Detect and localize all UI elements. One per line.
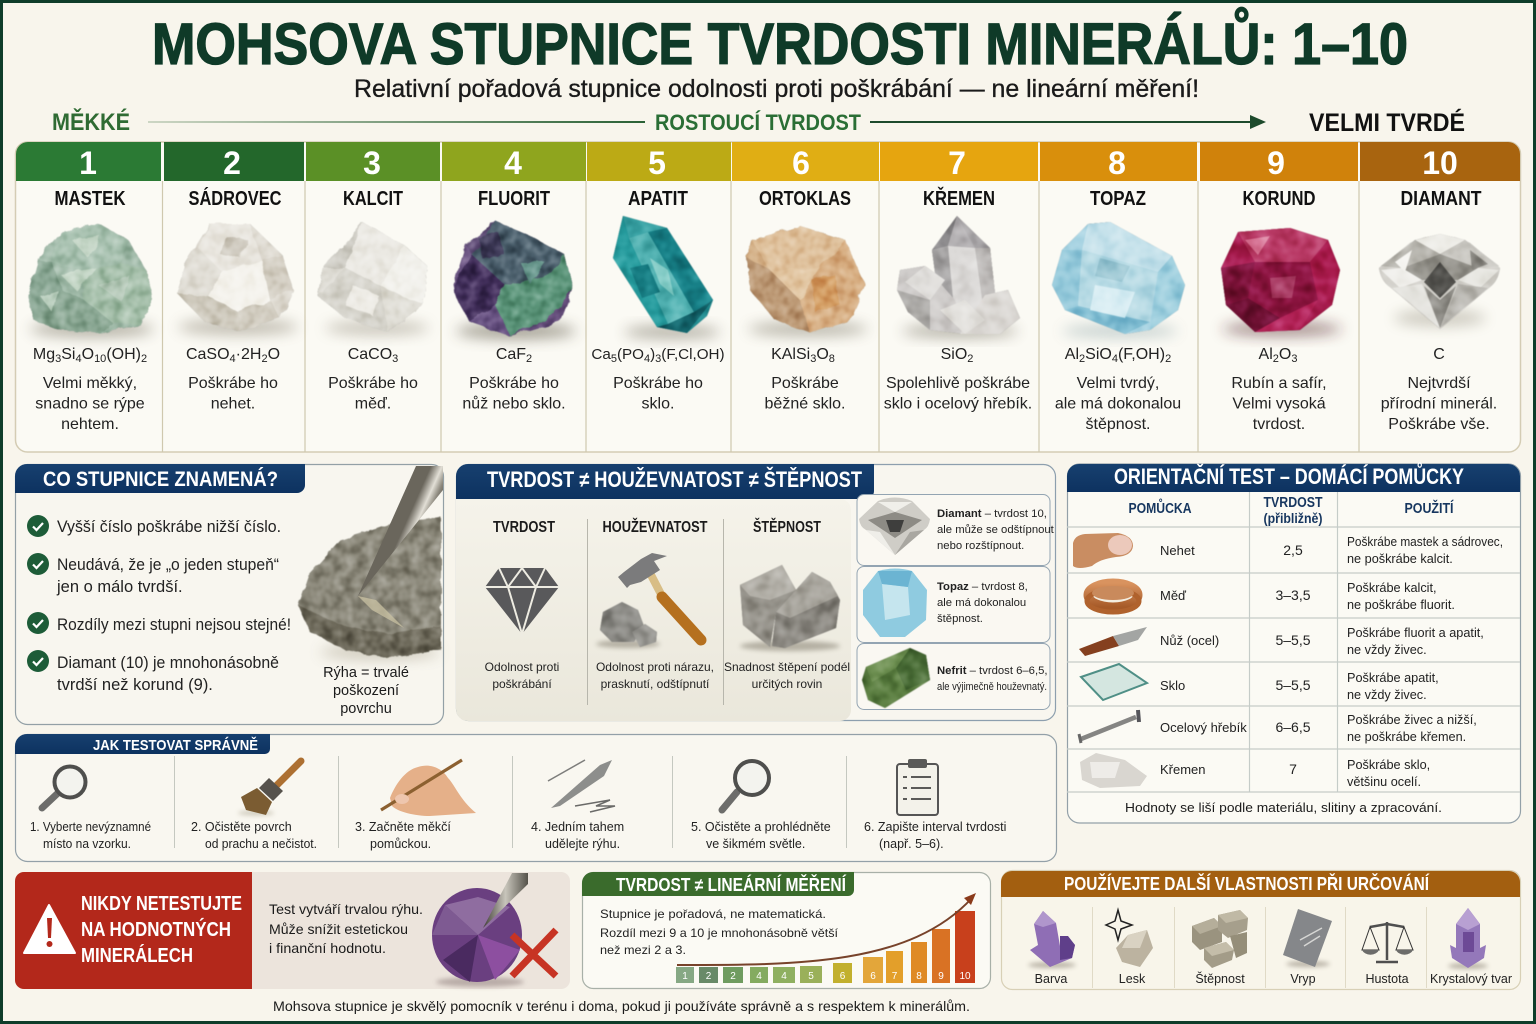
- mineral 5: apatit: 5: [611, 353, 617, 365]
- example: diamant: ale může se odštípnout: [937, 524, 1055, 536]
- property: barva: Barva: [1035, 972, 1067, 986]
- mineral 8: topaz: SiO: [1085, 346, 1112, 363]
- mineral 1: mastek: Si: [61, 346, 75, 363]
- property: lesk: [1106, 910, 1153, 986]
- header: TVRDOST ≠ LINEÁRNÍ MĚŘENÍ: [616, 874, 847, 895]
- step 2: 2. Očistěte povrch: [191, 820, 292, 834]
- example: topaz: [857, 566, 1050, 642]
- mineral 2: sádrovec: O: [268, 346, 280, 363]
- caption: rýha: povrchu: [340, 701, 392, 717]
- mineral 1: mastek: Mg: [33, 346, 55, 363]
- mineral 4: fluorit: 2: [526, 353, 532, 365]
- checklist: Diamant (10) je mnohonásobně: [57, 654, 279, 672]
- mineral 5: apatit: ): [650, 346, 655, 363]
- row: nůž: 5–5,5: [1275, 632, 1311, 648]
- mineral 6: ortoklas: ORTOKLAS: [759, 188, 851, 210]
- mineral 3: kalcit: měď.: [355, 396, 391, 412]
- property: vryp: [1283, 909, 1332, 986]
- mineral 8: topaz: štěpnost.: [1086, 416, 1150, 433]
- explanation: Rozdíl mezi 9 a 10 je mnohonásobně větší: [600, 926, 839, 940]
- caption: rýha: poškození: [333, 683, 399, 699]
- table headers: [1128, 495, 1454, 526]
- step 3: 3. Začněte měkčí: [355, 820, 451, 834]
- property: krystalový tvar: Krystalový tvar: [1430, 972, 1512, 986]
- bar chart: [676, 893, 976, 983]
- icon: steel scriber: [358, 466, 443, 596]
- mineral 1: mastek: snadno se rýpe: [35, 396, 145, 412]
- mineral 7: křemen: sklo i ocelový hřebík.: [884, 396, 1032, 412]
- row: měď: Měď: [1160, 588, 1187, 603]
- step 1: 1. Vyberte nevýznamné: [30, 820, 151, 834]
- mineral 3: kalcit: Poškrábe ho: [328, 375, 418, 392]
- row: sklo: [1081, 664, 1439, 702]
- mineral 10: diamant: Nejtvrdší: [1407, 375, 1471, 392]
- mineral 6: ortoklas: běžné sklo.: [765, 396, 845, 412]
- mineral 2: sádrovec: 4: [230, 353, 236, 365]
- row: sklo: ne vždy živec.: [1347, 688, 1427, 702]
- checklist: tvrdší než korund (9).: [57, 676, 213, 694]
- mineral 8: topaz: ale má dokonalou: [1055, 396, 1181, 412]
- mineral 1: mastek: nehtem.: [61, 416, 119, 433]
- table headers: POMŮCKA: [1128, 498, 1192, 517]
- mineral 8: topaz: TOPAZ: [1090, 188, 1146, 210]
- property: hustota: Hustota: [1365, 972, 1409, 986]
- comparison area: [456, 499, 851, 721]
- mineral 1: mastek: MASTEK: [54, 188, 126, 210]
- header: [456, 464, 874, 499]
- table headers: (přibližně): [1264, 511, 1322, 526]
- mineral 1: mastek: O: [82, 346, 94, 363]
- mineral 1: mastek: 4: [75, 353, 82, 365]
- row: sklo: Poškrábe apatit,: [1347, 671, 1439, 685]
- header: [1001, 871, 1520, 897]
- property: vryp: Vryp: [1290, 972, 1316, 986]
- mineral 9: korund: tvrdost.: [1253, 416, 1305, 433]
- bar chart: 6: [870, 971, 876, 982]
- checklist: [27, 515, 291, 694]
- mineral 4: fluorit: [442, 142, 586, 412]
- header: [582, 872, 854, 896]
- subtitle: Relativní pořadová stupnice odolnosti proti poškrábání — ne lineární měření!: [354, 75, 1199, 103]
- column: houževnatost: [596, 517, 714, 691]
- mineral 1: mastek: 2: [141, 353, 147, 365]
- step 4: [531, 760, 624, 851]
- row: nehet: ne poškrábe kalcit.: [1347, 552, 1453, 566]
- example: topaz: štěpnost.: [937, 613, 983, 625]
- step 6: 6. Zapište interval tvrdosti: [864, 820, 1006, 834]
- mineral 4: fluorit: FLUORIT: [478, 188, 550, 210]
- mineral 5: apatit: 4: [644, 353, 650, 365]
- table footnote: Hodnoty se liší podle materiálu, slitiny a zpracování.: [1125, 800, 1442, 815]
- explanation: [600, 907, 839, 957]
- row: nehet: 2,5: [1283, 542, 1303, 558]
- mineral 4: fluorit: nůž nebo sklo.: [462, 394, 566, 412]
- property: barva: [1028, 911, 1076, 986]
- mineral 9: korund: 3: [1291, 353, 1297, 365]
- property: lesk: Lesk: [1119, 972, 1146, 986]
- bar chart: 9: [938, 971, 944, 982]
- row: ocelový hřebík: Ocelový hřebík: [1160, 720, 1247, 735]
- mineral 9: korund: [1200, 142, 1358, 433]
- mineral 10: diamant: C: [1433, 346, 1445, 363]
- header: POUŽÍVEJTE DALŠÍ VLASTNOSTI PŘI URČOVÁNÍ: [1064, 873, 1430, 894]
- mineral 3: kalcit: 3: [363, 145, 381, 181]
- hardness direction axis: VELMI TVRDÉ: [1309, 108, 1465, 137]
- row: ocelový hřebík: ne poškrábe křemen.: [1347, 730, 1466, 744]
- mineral 5: apatit: Poškrábe ho: [613, 375, 703, 392]
- example: nefrit: [857, 644, 1050, 710]
- warning heading: MINERÁLECH: [81, 944, 193, 967]
- row: sklo: 5–5,5: [1275, 677, 1311, 693]
- mineral 7: křemen: [880, 142, 1038, 412]
- property: krystalový tvar: [1430, 908, 1512, 986]
- row: křemen: Křemen: [1160, 762, 1206, 777]
- example: diamant: Diamant – tvrdost 10,: [937, 508, 1047, 520]
- bar chart: 4: [781, 971, 787, 982]
- property: štěpnost: Štěpnost: [1195, 971, 1245, 986]
- column: štěpnost: určitých rovin: [752, 677, 822, 691]
- mineral 10: diamant: DIAMANT: [1400, 188, 1482, 210]
- mineral 3: kalcit: 3: [392, 353, 398, 365]
- mineral 3: kalcit: [306, 142, 440, 412]
- mineral 1: mastek: Velmi měkký,: [43, 375, 137, 392]
- step 5: [691, 761, 831, 851]
- mineral 2: sádrovec: 2: [261, 353, 268, 365]
- checklist: Neudává, že je „o jeden stupeň“: [57, 556, 279, 574]
- mineral 9: korund: Velmi vysoká: [1232, 396, 1326, 412]
- mineral 7: křemen: 7: [948, 145, 966, 181]
- mineral 9: korund: KORUND: [1242, 188, 1316, 210]
- mineral 8: topaz: (F,OH): [1118, 346, 1165, 363]
- row: křemen: 7: [1289, 761, 1297, 777]
- bar chart: 2: [706, 971, 712, 982]
- mineral 8: topaz: [1040, 142, 1197, 433]
- bar chart: 2: [730, 971, 736, 982]
- mineral 6: ortoklas: Poškrábe: [771, 375, 839, 392]
- row: nehet: [1073, 533, 1503, 568]
- caption: rýha: Rýha = trvalé: [323, 665, 409, 681]
- column: houževnatost: prasknutí, odštípnutí: [601, 677, 710, 691]
- bar chart: 6: [840, 971, 846, 982]
- mineral 10: diamant: Poškrábe vše.: [1388, 416, 1490, 433]
- column: houževnatost: HOUŽEVNATOST: [602, 517, 708, 536]
- warning heading: NA HODNOTNÝCH: [81, 917, 231, 941]
- row: ocelový hřebík: Poškrábe živec a nižší,: [1347, 713, 1477, 727]
- mineral 8: topaz: 8: [1108, 145, 1126, 181]
- column: tvrdost: Odolnost proti: [485, 660, 559, 674]
- mineral 5: apatit: sklo.: [642, 396, 674, 412]
- example: diamant: nebo rozštípnout.: [937, 540, 1024, 552]
- column: štěpnost: Snadnost štěpení podél: [724, 660, 850, 674]
- hardness direction axis: ROSTOUCÍ TVRDOST: [655, 110, 861, 135]
- warning text: Může snížit estetickou: [269, 921, 408, 937]
- mineral 1: mastek: (OH): [106, 346, 141, 363]
- mineral 9: korund: Al: [1259, 346, 1273, 363]
- mineral 2: sádrovec: ·2H: [236, 346, 261, 363]
- row: nůž: Poškrábe fluorit a apatit,: [1347, 626, 1484, 640]
- step 6: (např. 5–6).: [879, 837, 944, 851]
- mineral 5: apatit: APATIT: [628, 188, 688, 210]
- header: TVRDOST ≠ HOUŽEVNATOST ≠ ŠTĚPNOST: [487, 467, 862, 492]
- explanation: Stupnice je pořadová, ne matematická.: [600, 907, 826, 921]
- column: štěpnost: ŠTĚPNOST: [753, 517, 821, 536]
- row: křemen: většinu ocelí.: [1347, 775, 1421, 789]
- row: nehet: Nehet: [1160, 543, 1195, 558]
- mineral 5: apatit: 5: [648, 145, 666, 181]
- mineral 1: mastek: [16, 142, 161, 433]
- header: [15, 734, 270, 754]
- row: nůž: [1079, 626, 1484, 657]
- column: houževnatost: Odolnost proti nárazu,: [596, 660, 714, 674]
- row: křemen: Poškrábe sklo,: [1347, 758, 1430, 772]
- step 3: pomůckou.: [370, 837, 431, 851]
- icon: gem with scriber and cross: [432, 873, 556, 987]
- mineral 8: topaz: Al: [1065, 346, 1079, 363]
- row: měď: ne poškrábe fluorit.: [1347, 598, 1455, 612]
- bar chart: 5: [808, 971, 814, 982]
- panel: tvrdost není lineární: [582, 872, 990, 988]
- mineral 5: apatit: 3: [655, 353, 661, 365]
- example: nefrit: ale výjimečně houževnatý.: [937, 681, 1047, 693]
- mineral 5: apatit: Ca: [591, 346, 611, 363]
- mineral 5: apatit: (PO: [617, 346, 644, 363]
- mineral 2: sádrovec: SÁDROVEC: [188, 187, 282, 210]
- step 5: ve šikmém světle.: [706, 837, 805, 851]
- table headers: POUŽITÍ: [1404, 499, 1454, 517]
- row: nůž: Nůž (ocel): [1160, 633, 1219, 648]
- row: ocelový hřebík: 6–6,5: [1275, 719, 1311, 735]
- hardness direction axis: [52, 108, 1465, 137]
- mineral 9: korund: 2: [1273, 353, 1279, 365]
- panel: další vlastnosti: [1001, 870, 1520, 990]
- mineral 8: topaz: 2: [1165, 353, 1171, 365]
- example: topaz: Topaz – tvrdost 8,: [937, 581, 1028, 593]
- title: MOHSOVA STUPNICE TVRDOSTI MINERÁLŮ: 1–10: [152, 8, 1408, 77]
- panel: co stupnice znamená: [15, 464, 444, 724]
- mineral 4: fluorit: 4: [504, 145, 522, 181]
- bar chart: 8: [916, 971, 922, 982]
- step 2: [191, 761, 317, 851]
- step 5: 5. Očistěte a prohlédněte: [691, 820, 831, 834]
- caption: rýha: [323, 665, 409, 717]
- property: hustota: [1362, 922, 1413, 986]
- step 2: od prachu a nečistot.: [205, 837, 317, 851]
- mineral 2: sádrovec: Poškrábe ho: [188, 375, 278, 392]
- example: nefrit: Nefrit – tvrdost 6–6,5,: [937, 665, 1048, 677]
- mineral 1: mastek: 3: [55, 353, 61, 365]
- bar chart: 4: [756, 971, 762, 982]
- mineral 7: křemen: Spolehlivě poškrábe: [886, 375, 1030, 392]
- example: diamant: [857, 494, 1055, 566]
- mineral 2: sádrovec: CaSO: [186, 346, 230, 363]
- bar chart: 7: [892, 971, 898, 982]
- warning text: Test vytváří trvalou rýhu.: [269, 901, 423, 917]
- mineral 4: fluorit: CaF: [496, 346, 526, 363]
- mineral 10: diamant: 10: [1422, 145, 1458, 181]
- mineral 5: apatit: (F,Cl,OH): [661, 346, 725, 363]
- mineral 9: korund: 9: [1267, 145, 1285, 181]
- column: tvrdost: [485, 519, 559, 691]
- mineral 10: diamant: přírodní minerál.: [1381, 396, 1497, 412]
- mineral 10: diamant: [1360, 142, 1520, 433]
- mineral 8: topaz: Velmi tvrdý,: [1077, 375, 1159, 392]
- mineral 3: kalcit: CaCO: [348, 346, 392, 363]
- mineral 2: sádrovec: 2: [223, 145, 241, 181]
- column: tvrdost: poškrábání: [492, 677, 552, 691]
- step 6: [864, 759, 1006, 851]
- row: ocelový hřebík: [1079, 710, 1477, 744]
- icon: warning triangle: [24, 905, 75, 953]
- mineral 1: mastek: 1: [79, 145, 97, 181]
- warning heading: [81, 893, 242, 967]
- mineral 7: křemen: 2: [967, 353, 973, 365]
- column: tvrdost: TVRDOST: [493, 519, 555, 536]
- panel: mineral scale: [16, 142, 1520, 452]
- explanation: než mezi 2 a 3.: [600, 943, 686, 957]
- mineral 6: ortoklas: [732, 142, 879, 412]
- panel: jak testovat správně: [15, 734, 1056, 862]
- mineral 6: ortoklas: KAlSi: [771, 346, 810, 363]
- column: štěpnost: [724, 517, 850, 691]
- header: CO STUPNICE ZNAMENÁ?: [43, 468, 278, 491]
- mineral 9: korund: O: [1279, 346, 1291, 363]
- mineral 1: mastek: 10: [94, 353, 106, 365]
- row: křemen: [1080, 753, 1430, 789]
- mineral 9: korund: Rubín a safír,: [1231, 375, 1327, 392]
- row: měď: 3–3,5: [1275, 587, 1311, 603]
- bar chart: 10: [959, 971, 971, 982]
- row: sklo: Sklo: [1160, 678, 1185, 693]
- mineral 2: sádrovec: [164, 142, 304, 412]
- checklist: Vyšší číslo poškrábe nižší číslo.: [57, 518, 281, 536]
- mineral 7: křemen: KŘEMEN: [923, 186, 995, 210]
- row: nehet: Poškrábe mastek a sádrovec,: [1347, 535, 1503, 549]
- mineral 7: křemen: SiO: [941, 346, 967, 363]
- header: JAK TESTOVAT SPRÁVNĚ: [93, 736, 258, 754]
- icon: scratched rock: [298, 517, 441, 659]
- mineral 2: sádrovec: nehet.: [211, 396, 255, 412]
- checklist: Rozdíly mezi stupni nejsou stejné!: [57, 616, 291, 634]
- table headers: TVRDOST: [1264, 495, 1323, 511]
- step 1: místo na vzorku.: [43, 837, 131, 851]
- step 4: 4. Jedním tahem: [531, 820, 624, 834]
- panel: tvrdost houževnatost štěpnost: [456, 464, 1056, 721]
- mineral 6: ortoklas: O: [816, 346, 829, 363]
- panel: orientační test: [1067, 461, 1520, 823]
- row: měď: Poškrábe kalcit,: [1347, 581, 1437, 595]
- mineral 6: ortoklas: 6: [792, 145, 810, 181]
- mineral 5: apatit: [587, 142, 731, 412]
- step 3: [355, 760, 476, 851]
- mineral 4: fluorit: Poškrábe ho: [469, 375, 559, 392]
- warning heading: NIKDY NETESTUJTE: [81, 893, 242, 915]
- step 4: udělejte rýhu.: [545, 837, 620, 851]
- checklist: jen o málo tvrdší.: [56, 578, 183, 596]
- header: ORIENTAČNÍ TEST – DOMÁCÍ POMŮCKY: [1114, 461, 1464, 489]
- mineral 3: kalcit: KALCIT: [343, 188, 403, 210]
- warning text: [269, 901, 423, 956]
- example: topaz: ale má dokonalou: [937, 597, 1026, 609]
- property: štěpnost: [1192, 910, 1248, 986]
- mineral 6: ortoklas: 3: [810, 353, 816, 365]
- mineral 8: topaz: 2: [1079, 353, 1085, 365]
- mineral 6: ortoklas: 8: [829, 353, 835, 365]
- panel: varování: [15, 872, 570, 989]
- footer note: Mohsova stupnice je skvělý pomocník v terénu i doma, pokud ji používáte správně a s respektem k minerálům.: [273, 998, 970, 1014]
- mineral 8: topaz: 4: [1112, 353, 1118, 365]
- bar chart: 1: [682, 971, 688, 982]
- row: měď: [1087, 581, 1455, 612]
- step 1: [30, 766, 151, 851]
- warning text: i finanční hodnotu.: [269, 940, 386, 956]
- hardness direction axis: MĚKKÉ: [52, 108, 130, 136]
- row: nůž: ne vždy živec.: [1347, 643, 1427, 657]
